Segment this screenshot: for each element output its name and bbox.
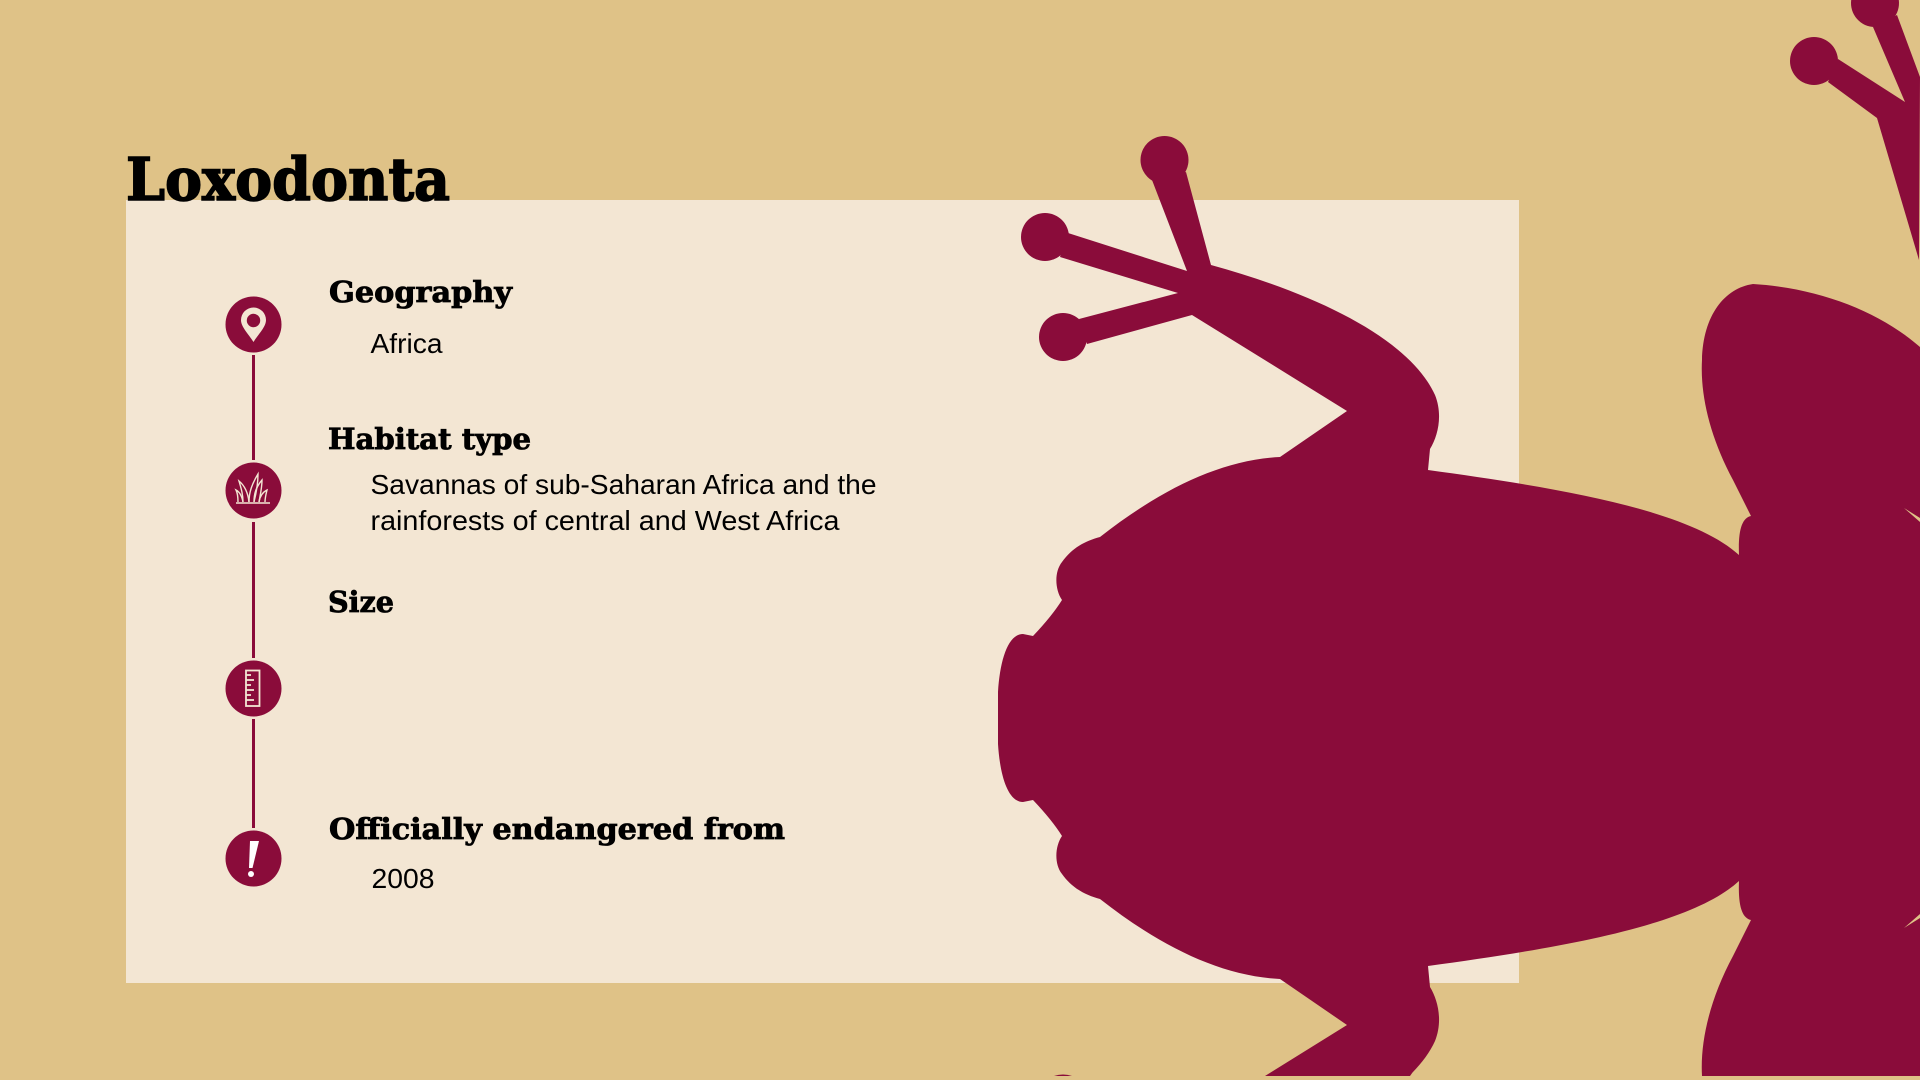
silhouette: upper half of body and front leg: [998, 172, 1920, 718]
icon: grass: [226, 462, 282, 518]
timeline connector lines: [252, 355, 255, 828]
heading: habitat type: Habitat type: [328, 422, 531, 456]
icon: location pin: [226, 296, 282, 352]
heading: officially endangered from: Officially endangered from: [329, 812, 785, 846]
toe pad: bottom edge: [1054, 1074, 1072, 1076]
panel: information card: [126, 200, 1519, 983]
section: officially endangered: [329, 812, 785, 894]
icon: exclamation mark: [226, 830, 282, 886]
text: habitat line 1: Savannas of sub-Saharan Africa and the: [370, 469, 876, 500]
section: habitat type: [328, 422, 876, 536]
icon: ruler: [226, 660, 282, 716]
text: endangered year: 2008: [372, 863, 434, 894]
toe pad: left upper: [1021, 213, 1069, 261]
silhouette: lower half of body and front leg: [998, 718, 1920, 1076]
title: Loxodonta: [126, 145, 450, 214]
rear foot toes, top right: [1790, 0, 1920, 260]
text: geography value: Africa: [370, 328, 443, 359]
heading: size: Size: [328, 585, 394, 619]
toe pad: top: [1140, 136, 1188, 184]
text: habitat line 2: rainforests of central and West Africa: [370, 505, 840, 536]
frog silhouette: [998, 0, 1920, 1076]
heading: geography: Geography: [329, 275, 513, 309]
section: geography: [329, 275, 513, 359]
toe pad: left lower: [1039, 313, 1087, 361]
